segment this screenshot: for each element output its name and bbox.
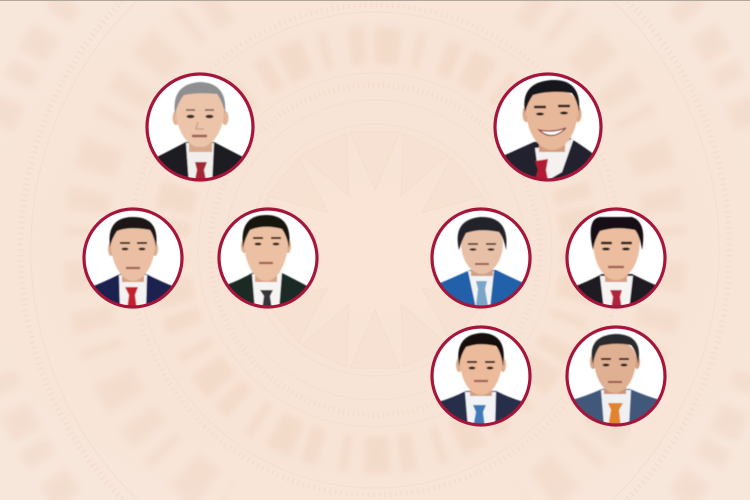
portrait: top left, grey-haired man — [147, 74, 253, 185]
portrait: bottom row, left — [432, 327, 530, 430]
portrait: middle row, third from left — [432, 209, 530, 312]
portrait: middle row, far left — [84, 209, 182, 312]
portrait: top right, smiling man — [495, 74, 601, 185]
portrait: middle row, far right — [567, 209, 665, 312]
portrait: bottom row, right — [567, 327, 665, 430]
portrait: middle row, second from left — [219, 209, 317, 312]
